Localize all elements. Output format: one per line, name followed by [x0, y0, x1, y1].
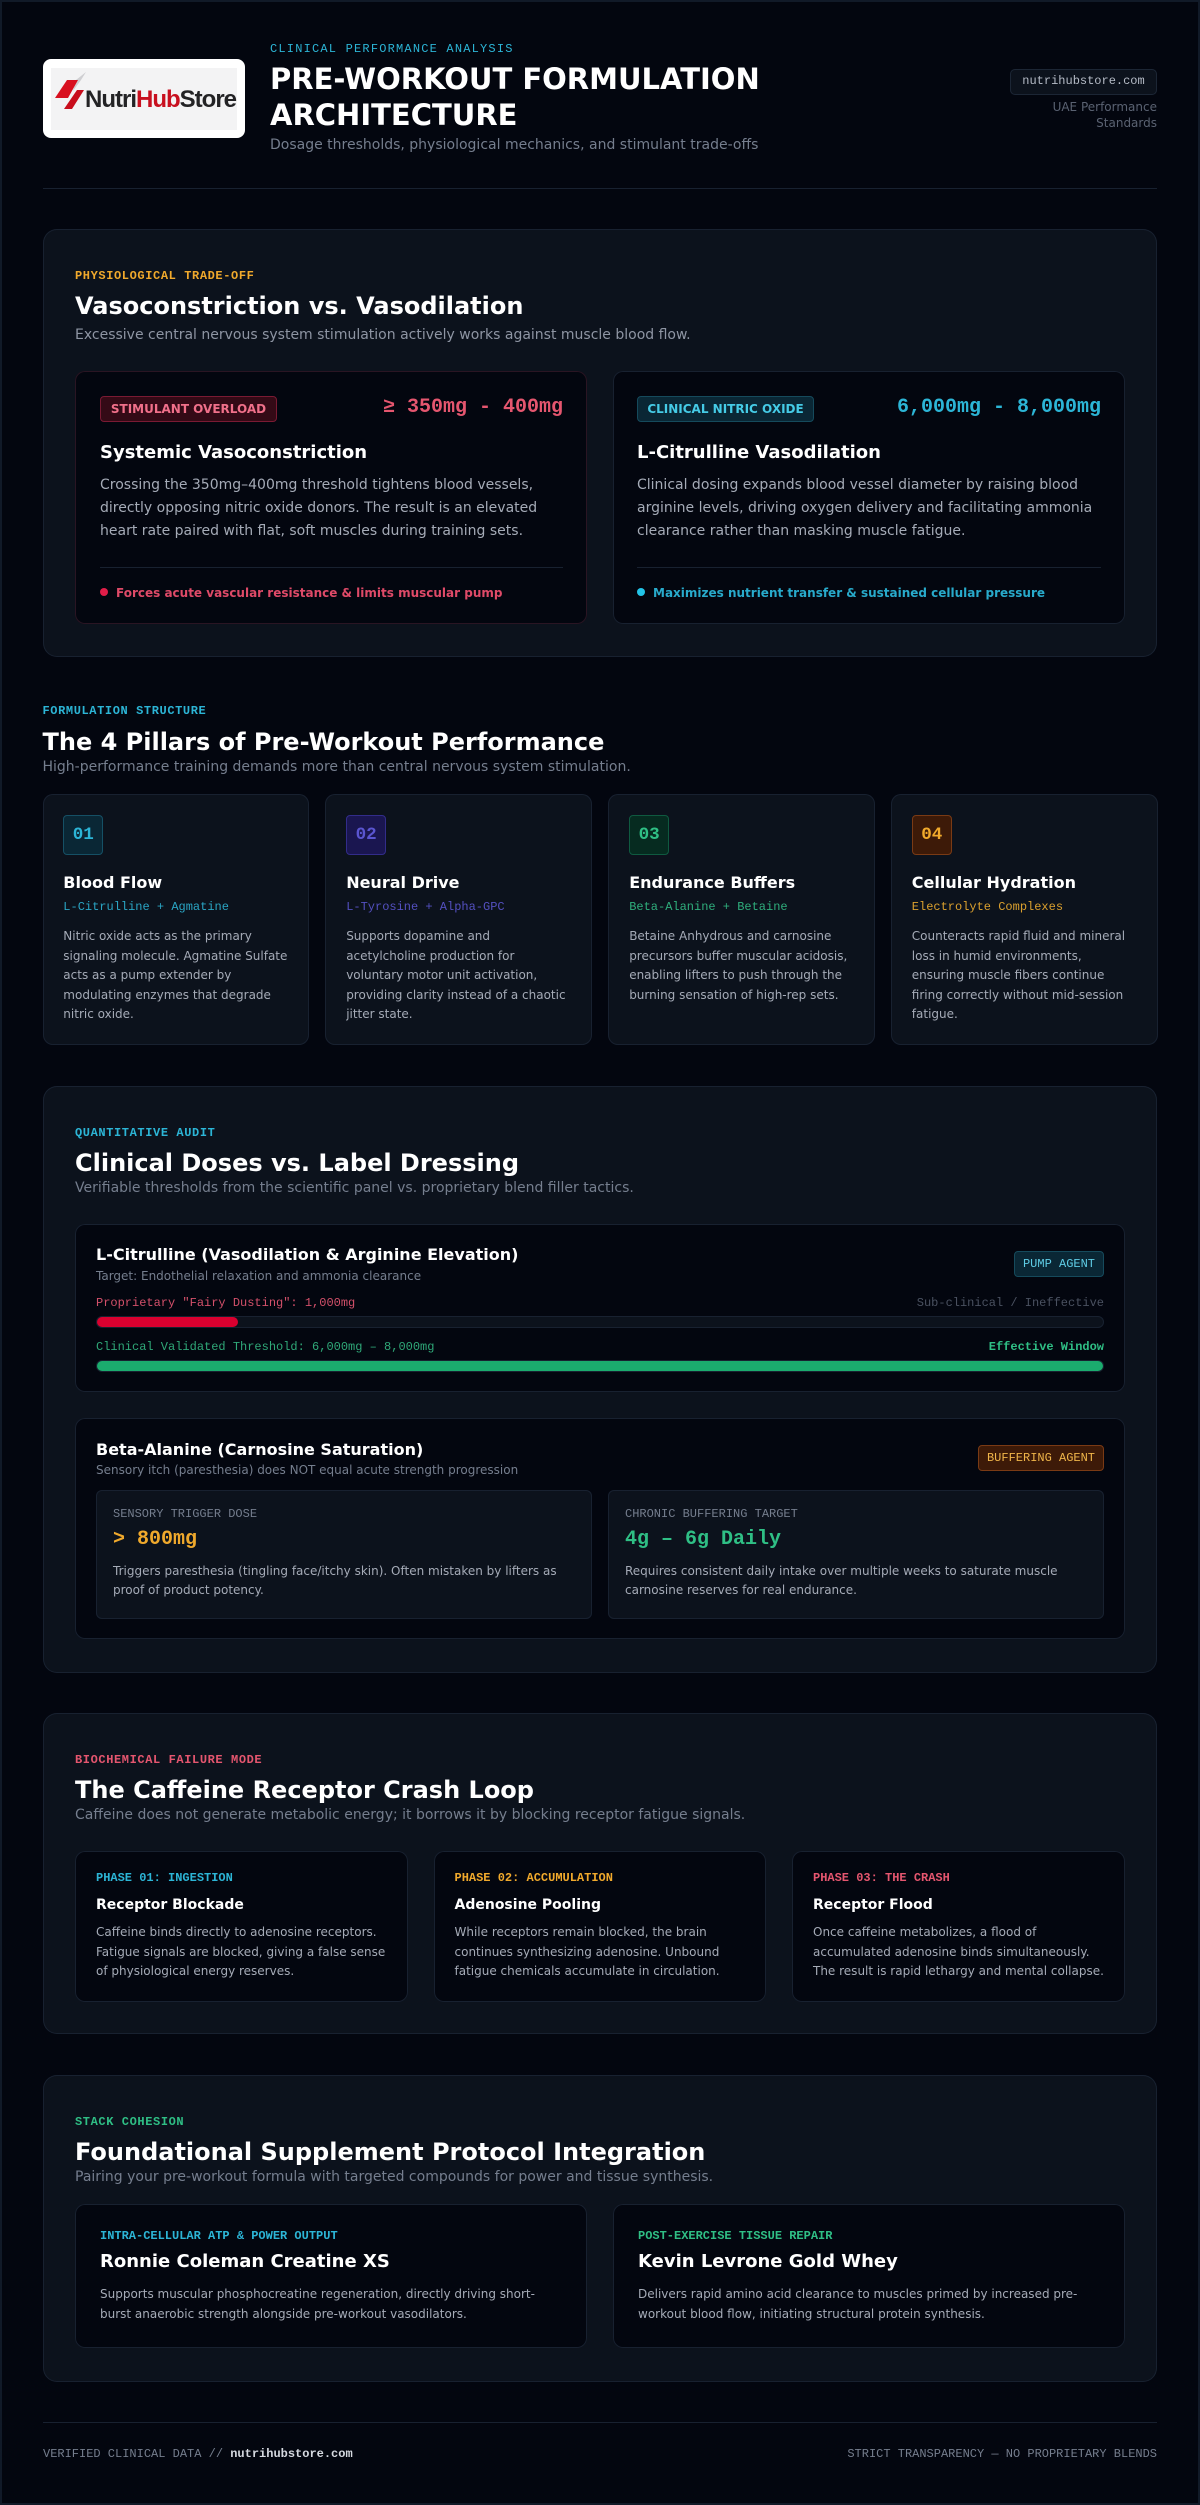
- phase text: The result is rapid lethargy and mental collapse.: [813, 1964, 1104, 1978]
- phase text: [812, 1925, 1104, 1978]
- panel: vasoconstriction vs vasodilation: [43, 229, 1157, 657]
- stat: chronic buffering: [608, 1490, 1104, 1619]
- stat label: CHRONIC BUFFERING TARGET: [625, 1507, 798, 1521]
- card heading: L-Citrulline Vasodilation: [637, 442, 881, 463]
- phase 3 card: [792, 1851, 1125, 2002]
- heading: The 4 Pillars of Pre-Workout Performance: [42, 728, 604, 756]
- stat value: > 800mg: [113, 1528, 197, 1551]
- panel: caffeine crash loop: [43, 1713, 1157, 2034]
- description: fatigue.: [912, 1007, 958, 1021]
- pillar name: Neural Drive: [346, 873, 460, 892]
- pillar name: Blood Flow: [63, 873, 162, 892]
- icon: logo slashes: [55, 72, 86, 109]
- subheading: Verifiable thresholds from the scientific panel vs. proprietary blend filler tactics.: [75, 1180, 634, 1196]
- phase text: fatigue chemicals accumulate in circulation.: [454, 1964, 720, 1978]
- number badge: 03: [639, 825, 660, 845]
- description: ensuring muscle fibers continue: [912, 968, 1104, 982]
- dose value: 6,000mg - 8,000mg: [897, 396, 1101, 419]
- card text: Delivers rapid amino acid clearance to muscles primed by increased pre-: [638, 2287, 1077, 2301]
- title: PRE-WORKOUT FORMULATION: [270, 62, 760, 96]
- card label: INTRA-CELLULAR ATP & POWER OUTPUT: [100, 2229, 338, 2243]
- card text: [100, 2287, 535, 2321]
- card text: [637, 477, 1092, 539]
- ingredients: L-Citrulline + Agmatine: [63, 900, 229, 914]
- eyebrow: QUANTITATIVE AUDIT: [75, 1126, 215, 1140]
- number badge: 04: [921, 825, 942, 845]
- logo: NutriHubStore: [43, 59, 245, 138]
- phase text: continues synthesizing adenosine. Unbound: [454, 1944, 719, 1958]
- description: providing clarity instead of a chaotic: [346, 988, 566, 1002]
- phase name: Adenosine Pooling: [454, 1897, 601, 1913]
- description: firing correctly without mid-session: [912, 988, 1123, 1002]
- stat text: Triggers paresthesia (tingling face/itchy skin). Often mistaken by lifters as: [113, 1564, 557, 1578]
- section heading: four pillars: [42, 704, 631, 775]
- title: ARCHITECTURE: [270, 98, 517, 132]
- pillar name: Cellular Hydration: [912, 873, 1076, 892]
- description: Counteracts rapid fluid and mineral: [912, 929, 1125, 943]
- tag: pump agent: PUMP AGENT: [1023, 1257, 1095, 1271]
- phase name: Receptor Blockade: [96, 1897, 244, 1913]
- label: fairy dusting: Proprietary "Fairy Dusting": 1,000mg: [96, 1296, 355, 1310]
- website pill: nutrihubstore.com: [1022, 74, 1145, 88]
- website pill: [1010, 69, 1157, 95]
- card: beta-alanine dosing: [75, 1418, 1125, 1639]
- card subtitle: Sensory itch (paresthesia) does NOT equal acute strength progression: [96, 1463, 518, 1477]
- number badge: [629, 815, 669, 855]
- badge: [100, 396, 277, 422]
- region note: Standards: [1096, 116, 1157, 130]
- product name: Kevin Levrone Gold Whey: [638, 2251, 898, 2272]
- description: acts as a pump extender by: [63, 968, 231, 982]
- card text: heart rate paired with flat, soft muscles during training sets.: [100, 523, 523, 539]
- subheading: High-performance training demands more than central nervous system stimulation.: [42, 759, 631, 775]
- stat text: [625, 1564, 1058, 1597]
- description: jitter state.: [346, 1007, 413, 1021]
- description: [63, 929, 287, 1021]
- subheading: Pairing your pre-workout formula with targeted compounds for power and tissue synthesis.: [75, 2169, 713, 2185]
- panel: foundational supplement protocol: [43, 2075, 1157, 2382]
- region note: [1053, 100, 1157, 130]
- number badge: [63, 815, 103, 855]
- description: [912, 929, 1125, 1021]
- phase text: accumulated adenosine binds simultaneously.: [813, 1944, 1090, 1958]
- number badge: [346, 815, 386, 855]
- card text: [100, 477, 537, 539]
- card title: L-Citrulline (Vasodilation & Arginine Elevation): [96, 1245, 518, 1264]
- pillar name: Endurance Buffers: [629, 873, 795, 892]
- card text: [638, 2287, 1077, 2321]
- phase text: Caffeine binds directly to adenosine receptors.: [96, 1925, 377, 1939]
- card text: arginine levels, driving oxygen delivery and facilitating ammonia: [637, 500, 1092, 516]
- pillar card: cellular hydration: [891, 794, 1158, 1045]
- bullet note: Maximizes nutrient transfer & sustained cellular pressure: [653, 586, 1045, 600]
- panel: clinical doses vs label dressing: [43, 1086, 1157, 1673]
- card: l-citrulline dosing: [75, 1224, 1125, 1392]
- phase label: PHASE 01: INGESTION: [96, 1871, 233, 1885]
- card text: Crossing the 350mg–400mg threshold tightens blood vessels,: [100, 477, 533, 493]
- bar: clinical dose: [96, 1360, 1104, 1372]
- phase text: [96, 1925, 385, 1978]
- tag: pump agent: [1014, 1251, 1104, 1277]
- phase name: Receptor Flood: [813, 1897, 933, 1913]
- label: sub-clinical: Sub-clinical / Ineffective: [917, 1296, 1104, 1310]
- phase 1 card: [75, 1851, 408, 2002]
- ingredients: L-Tyrosine + Alpha-GPC: [346, 900, 505, 914]
- description: voluntary motor unit activation,: [346, 968, 537, 982]
- pillar card: blood flow: [42, 794, 309, 1045]
- phase label: PHASE 03: THE CRASH: [813, 1871, 950, 1885]
- subtitle: Dosage thresholds, physiological mechanics, and stimulant trade-offs: [270, 137, 758, 153]
- number badge: 02: [356, 825, 377, 845]
- footer: [43, 2422, 1157, 2470]
- badge: CLINICAL NITRIC OXIDE: [647, 402, 804, 416]
- phase text: [454, 1925, 720, 1978]
- description: Nitric oxide acts as the primary: [63, 929, 252, 943]
- card text: workout blood flow, initiating structural protein synthesis.: [638, 2307, 985, 2321]
- description: [346, 929, 566, 1021]
- description: burning sensation of high-rep sets.: [629, 988, 839, 1002]
- tag: buffering agent: [978, 1445, 1104, 1471]
- label: clinical threshold: Clinical Validated Threshold: 6,000mg – 8,000mg: [96, 1340, 434, 1354]
- description: Supports dopamine and: [346, 929, 490, 943]
- title: [270, 62, 760, 132]
- card heading: Systemic Vasoconstriction: [100, 442, 367, 463]
- phase text: Once caffeine metabolizes, a flood of: [813, 1925, 1036, 1939]
- stat text: Requires consistent daily intake over multiple weeks to saturate muscle: [625, 1564, 1058, 1578]
- phase text: Fatigue signals are blocked, giving a false sense: [96, 1944, 385, 1958]
- ingredients: Electrolyte Complexes: [912, 900, 1063, 914]
- card title: Beta-Alanine (Carnosine Saturation): [96, 1440, 423, 1459]
- card text: directly opposing nitric oxide donors. The result is an elevated: [100, 500, 537, 516]
- stat: sensory trigger: [96, 1490, 592, 1619]
- eyebrow: PHYSIOLOGICAL TRADE-OFF: [75, 269, 254, 283]
- pillar card: neural drive: [325, 794, 592, 1045]
- phase text: of physiological energy reserves.: [96, 1964, 294, 1978]
- eyebrow: BIOCHEMICAL FAILURE MODE: [75, 1753, 262, 1767]
- stat text: carnosine reserves for real endurance.: [625, 1583, 857, 1597]
- subheading: Excessive central nervous system stimulation actively works against muscle blood flow.: [75, 326, 691, 342]
- logo wordmark: NutriHubStore: [85, 86, 236, 113]
- badge: [637, 396, 814, 422]
- eyebrow: CLINICAL PERFORMANCE ANALYSIS: [270, 42, 514, 56]
- pillar card: endurance buffers: [608, 794, 875, 1045]
- card subtitle: Target: Endothelial relaxation and ammonia clearance: [96, 1269, 421, 1283]
- card text: Clinical dosing expands blood vessel diameter by raising blood: [637, 477, 1078, 493]
- card text: burst anaerobic strength alongside pre-workout vasodilators.: [100, 2307, 467, 2321]
- stat label: SENSORY TRIGGER DOSE: [113, 1507, 257, 1521]
- heading: Clinical Doses vs. Label Dressing: [75, 1149, 519, 1177]
- phase text: While receptors remain blocked, the brain: [454, 1925, 707, 1939]
- header: [43, 42, 1157, 189]
- card: creatine: [75, 2204, 587, 2348]
- phase label: PHASE 02: ACCUMULATION: [454, 1871, 613, 1885]
- bar: fairy dusting dose: [96, 1316, 1104, 1328]
- description: [629, 929, 847, 1002]
- card text: Supports muscular phosphocreatine regeneration, directly driving short-: [100, 2287, 535, 2301]
- description: enabling lifters to push through the: [629, 968, 842, 982]
- heading: The Caffeine Receptor Crash Loop: [75, 1776, 534, 1804]
- description: loss in humid environments,: [912, 948, 1082, 962]
- card: l-citrulline vasodilation: [613, 371, 1125, 624]
- stat text: proof of product potency.: [113, 1583, 264, 1597]
- heading: Vasoconstriction vs. Vasodilation: [75, 292, 523, 320]
- stat value: 4g – 6g Daily: [625, 1528, 781, 1551]
- tag: buffering agent: BUFFERING AGENT: [987, 1451, 1095, 1465]
- eyebrow: FORMULATION STRUCTURE: [42, 704, 206, 718]
- number badge: [912, 815, 952, 855]
- eyebrow: STACK COHESION: [75, 2115, 184, 2129]
- heading: Foundational Supplement Protocol Integration: [75, 2138, 705, 2166]
- dose value: ≥ 350mg - 400mg: [383, 396, 563, 419]
- subheading: Caffeine does not generate metabolic energy; it borrows it by blocking receptor fatigue signals.: [75, 1807, 745, 1823]
- description: nitric oxide.: [63, 1007, 134, 1021]
- card label: POST-EXERCISE TISSUE REPAIR: [638, 2229, 832, 2243]
- description: Betaine Anhydrous and carnosine: [629, 929, 831, 943]
- description: signaling molecule. Agmatine Sulfate: [63, 948, 287, 962]
- card: whey: [613, 2204, 1125, 2348]
- ingredients: Beta-Alanine + Betaine: [629, 900, 788, 914]
- stat text: [112, 1564, 557, 1597]
- card text: clearance rather than masking muscle fatigue.: [637, 523, 965, 539]
- footer note: STRICT TRANSPARENCY — NO PROPRIETARY BLENDS: [847, 2447, 1157, 2461]
- description: acetylcholine production for: [346, 948, 514, 962]
- product name: Ronnie Coleman Creatine XS: [100, 2251, 390, 2272]
- phase 2 card: [434, 1851, 766, 2002]
- description: precursors buffer muscular acidosis,: [629, 948, 847, 962]
- bullet note: Forces acute vascular resistance & limits muscular pump: [116, 586, 502, 600]
- badge: STIMULANT OVERLOAD: [111, 402, 266, 416]
- number badge: 01: [73, 825, 94, 845]
- footer source: VERIFIED CLINICAL DATA // nutrihubstore.com: [43, 2447, 353, 2461]
- description: modulating enzymes that degrade: [63, 988, 271, 1002]
- label: effective window: Effective Window: [989, 1340, 1104, 1354]
- card: systemic vasoconstriction: [75, 371, 587, 624]
- region note: UAE Performance: [1053, 100, 1157, 114]
